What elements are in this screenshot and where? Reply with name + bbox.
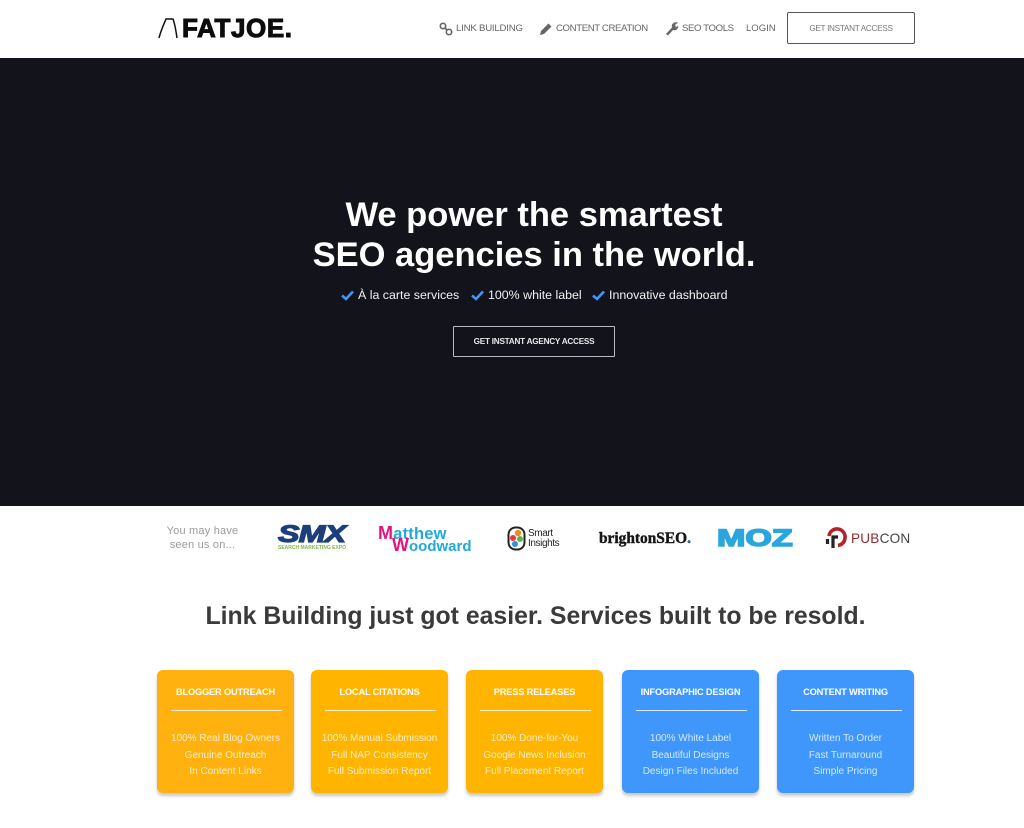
logo: MOZ: MOZ [717, 525, 793, 552]
card: press releases: Full Placement Report [485, 766, 584, 777]
check icon 3 [592, 290, 605, 301]
card: blogger outreach: In Content Links [189, 766, 262, 777]
hero button [453, 326, 615, 357]
logo: Smart Insights: Smart [528, 528, 553, 539]
logo: SMX: SMX [278, 521, 345, 548]
nav icon: wrench [666, 22, 678, 36]
logo wordmark: FATJOE. [182, 13, 293, 43]
nav icon: link [440, 22, 452, 36]
logo: Matthew Woodward [378, 523, 472, 555]
logo: Matthew Woodward: Woodward [392, 535, 472, 555]
card: local citations: Full Submission Report [328, 766, 431, 777]
card: content writing: Simple Pricing [814, 766, 877, 777]
card: infographic design: Beautiful Designs [652, 750, 729, 761]
check icon 1 [341, 290, 354, 301]
nav button: GET INSTANT ACCESS [809, 24, 893, 33]
logo [158, 13, 293, 43]
logo: SMX: SEARCH MARKETING EXPO [278, 545, 346, 551]
card: blogger outreach: BLOGGER OUTREACH [176, 687, 275, 697]
nav icon: pencil [540, 24, 552, 35]
seen on text: You may have [167, 525, 238, 537]
card: local citations [311, 670, 448, 793]
card: infographic design [622, 670, 759, 793]
logo: Matthew Woodward: Matthew [378, 523, 447, 543]
section heading: Link Building just got easier. Services built to be resold. [205, 603, 866, 630]
feature: white label: 100% white label [488, 288, 582, 302]
logo: Smart Insights: Insights [528, 538, 559, 549]
card: local citations: LOCAL CITATIONS [339, 687, 420, 697]
card: blogger outreach: Genuine Outreach [185, 750, 266, 761]
nav: link building: LINK BUILDING [456, 23, 523, 34]
logo: Pubcon [826, 527, 910, 548]
card: press releases: Google News Inclusion [483, 750, 586, 761]
card: content writing [777, 670, 914, 793]
press strip [167, 521, 910, 555]
nav: seo tools: SEO TOOLS [682, 23, 734, 34]
card: press releases [466, 670, 603, 793]
card: blogger outreach: 100% Real Blog Owners [171, 733, 280, 744]
hero heading [313, 196, 755, 274]
feature: a la carte: À la carte services [358, 288, 459, 302]
header bar [0, 0, 1024, 58]
nav: content creation: CONTENT CREATION [556, 23, 648, 34]
card: content writing: Fast Turnaround [809, 750, 882, 761]
card: press releases: 100% Done-for-You [491, 733, 578, 744]
card: infographic design: 100% White Label [650, 733, 731, 744]
hero heading: We power the smartest [345, 196, 723, 234]
card: infographic design: INFOGRAPHIC DESIGN [641, 687, 740, 697]
nav: login: LOGIN [746, 23, 776, 34]
nav button [787, 12, 915, 44]
card: blogger outreach [157, 670, 294, 793]
card: press releases: PRESS RELEASES [494, 687, 575, 697]
card: local citations: Full NAP Consistency [331, 750, 428, 761]
logo: Smart Insights [508, 526, 560, 550]
seen on text [167, 525, 238, 551]
hero panel [0, 58, 1024, 506]
check icon 2 [471, 290, 484, 301]
logo: Pubcon: PUBCON [851, 531, 910, 546]
seen on text: seen us on... [170, 539, 235, 551]
card: local citations: 100% Manual Submission [322, 733, 437, 744]
logo icon: trousers [158, 18, 178, 38]
card: content writing: CONTENT WRITING [803, 687, 888, 697]
hero button: GET INSTANT AGENCY ACCESS [474, 337, 594, 346]
logo: brightonSEO: brightonSEO. [599, 530, 691, 547]
feature: dashboard: Innovative dashboard [609, 288, 728, 302]
hero heading: SEO agencies in the world. [313, 236, 755, 274]
card: infographic design: Design Files Included [643, 766, 738, 777]
card: content writing: Written To Order [809, 733, 882, 744]
